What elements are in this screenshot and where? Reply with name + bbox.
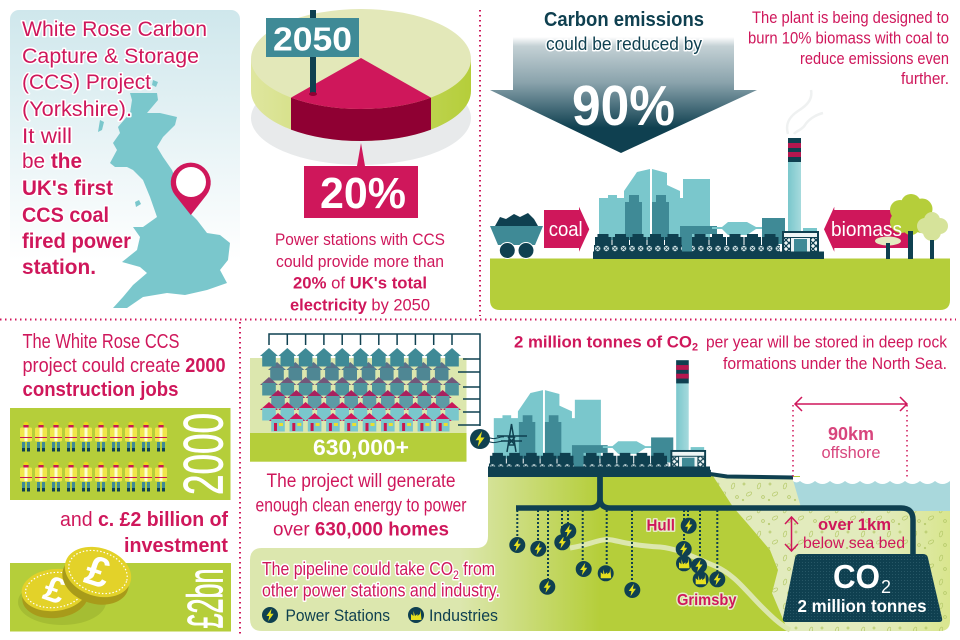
text: electricity share description: electricity by 2050 [290,296,430,314]
text: project introduction: It will [22,125,72,148]
text: construction jobs: The White Rose CCS [22,331,180,353]
text: construction jobs: project could create 2000 [22,355,226,377]
legend: power stations and industries: Industries [429,606,498,625]
illustration: rows of houses [260,348,461,432]
text: electricity share description: 20% of UK's total [293,274,427,292]
text: homes powered [256,470,467,540]
storage: CO2 2 million tonnes: 2 [881,577,891,597]
text: project introduction: White Rose Carbon [22,18,207,41]
text: pipeline note: 2 [453,568,459,582]
icon: location pin [171,163,211,215]
text: project introduction [22,18,207,279]
text: construction jobs: construction jobs [22,379,178,401]
sign: 2050: 2050 [273,20,352,58]
text: homes powered: enough clean energy to power [256,494,467,516]
sea: North Sea water [793,477,950,511]
text: investment [60,509,228,557]
panel: sea bed [713,476,950,631]
illustration: power plant on coast [488,360,711,477]
text: electricity share description: could provide more than [276,252,444,271]
label: over 1km below sea bed [803,516,905,552]
panel: 2000 jobs with workers [10,408,234,500]
panel: £2bn investment with coins: £ [79,545,116,597]
legend: power stations and industries: Power Stations [286,606,390,625]
pipeline: dotted branches [517,510,717,585]
text: biomass note [748,8,949,88]
text: electricity share description: Power stations with CCS [275,230,445,249]
icon: pylon [488,424,527,452]
panel: £2bn investment with coins [10,539,234,632]
text: biomass note: further. [901,69,949,88]
arrow: emissions reduction [490,37,757,153]
text: electricity share description [275,230,445,314]
text: project introduction: (CCS) Project [22,71,151,94]
label: over 1km below sea bed: over 1km [818,516,891,534]
label: 90km offshore: offshore [822,444,880,462]
heading: carbon emissions [544,9,704,54]
text: homes powered: over 630,000 homes [273,518,449,540]
icon: coal cart [490,213,543,258]
arrow: coal [544,207,589,252]
banner: 630,000+ [250,433,466,462]
text: pipeline note: The pipeline could take CO [262,559,479,579]
arrow: depth [785,517,798,551]
banner: 630,000+: 630,000+ [313,435,409,460]
callout: 20%: 20% [320,169,406,218]
icon: power lines to homes [269,334,480,426]
label: over 1km below sea bed: below sea bed [803,535,905,552]
legend: power stations and industries [262,606,498,625]
illustration: power plant [593,138,824,259]
storage: CO2 2 million tonnes: CO [833,558,880,595]
storage: CO2 2 million tonnes: 2 million tonnes [798,596,927,616]
arrow: coal: coal [549,219,583,241]
text: pipeline note: from [459,559,495,579]
text: homes powered: The project will generate [266,470,456,492]
panel: land cross-section [250,476,800,631]
icon: smoke [787,90,823,134]
label: 90km offshore [822,424,880,462]
text: investment: and c. £2 billion of [60,509,228,531]
text: project introduction: be the [22,150,82,173]
icons: power stations and industries on map [509,518,725,598]
text: pipeline note: other power stations and industry. [262,580,500,600]
text: pipeline note [262,559,500,600]
heading: carbon emissions: Carbon emissions [544,9,704,31]
pipeline: network [488,466,913,556]
icon: grid connection [470,429,490,449]
label: Grimsby: Grimsby [677,592,737,609]
arrow: biomass with trees: biomass [831,219,902,241]
panel: 2000 jobs with workers: 2000 [172,413,234,495]
panel: UK map background [10,10,240,305]
callout: 20% [304,143,418,218]
panel: homes background [250,358,466,433]
label: Hull: Hull [646,518,675,534]
stat: 90%: 90% [572,74,675,138]
text: CO2 storage: 2 million tonnes of CO [514,332,694,352]
ground: top panel [490,258,950,310]
arrow: 90km span [793,397,907,480]
text: CO2 storage: formations under the North Sea. [723,354,947,373]
text: construction jobs [22,331,226,401]
text: CO2 storage [514,332,947,373]
panel: £2bn investment with coins: £ [39,567,71,612]
map: United Kingdom [98,80,230,308]
text: project introduction: station. [22,256,96,279]
text: project introduction: Capture & Storage [22,45,199,68]
chart: 3D pie showing 20% share [251,9,471,165]
text: project introduction: CCS coal [22,204,109,227]
text: project introduction: fired power [22,230,131,253]
river: Humber estuary [570,540,790,630]
label: 90km offshore: 90km [828,424,874,444]
text: project introduction: UK's first [22,177,113,200]
text: project introduction: (Yorkshire). [22,98,132,121]
panel: £2bn investment with coins: £2bn [178,568,234,628]
heading: carbon emissions: could be reduced by [546,33,703,54]
text: investment: investment [124,535,228,557]
arrow: biomass with trees [824,194,948,259]
text: CO2 storage: 2 [692,342,698,354]
storage: CO2 2 million tonnes [783,554,942,622]
